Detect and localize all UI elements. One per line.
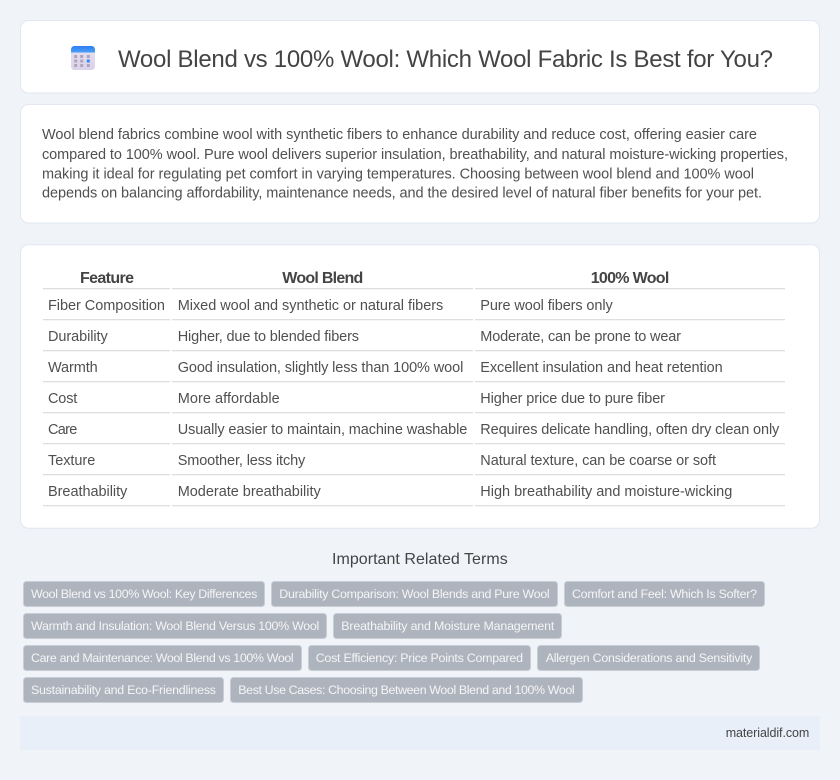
title: Wool Blend vs 100% Wool: Which Wool Fabric Is Best for You?	[118, 46, 773, 73]
icon: calendar	[71, 46, 95, 70]
table row: care: Care	[48, 422, 77, 438]
table row: breathability: Moderate breathability	[178, 484, 321, 500]
table row: warmth: Good insulation, slightly less than 100% wool	[178, 360, 463, 376]
table header row: Wool Blend	[282, 270, 363, 287]
panel: comparison table	[20, 245, 820, 528]
table row: warmth: Excellent insulation and heat retention	[480, 360, 723, 376]
text block: introduction paragraph	[42, 127, 788, 202]
table row: cost: More affordable	[178, 391, 280, 407]
heading: important related terms: Important Related Terms	[332, 551, 508, 568]
table row: care: Usually easier to maintain, machine washable	[178, 422, 467, 438]
tag: durability comparison	[272, 582, 558, 606]
tag: sustainability: Sustainability and Eco-Friendliness	[31, 683, 216, 697]
table row: durability: Moderate, can be prone to wear	[480, 329, 681, 345]
table row: fiber composition: Pure wool fibers only	[480, 298, 613, 314]
table header row	[43, 270, 785, 289]
table header row: 100% Wool	[591, 270, 669, 287]
table row: warmth: Warmth	[48, 360, 98, 376]
table row: breathability	[43, 484, 785, 506]
tag: durability comparison: Durability Comparison: Wool Blends and Pure Wool	[279, 587, 550, 601]
table row: care: Requires delicate handling, often dry clean only	[480, 422, 780, 438]
tag: cost efficiency	[308, 646, 530, 670]
text block: introduction paragraph: Wool blend fabrics combine wool with synthetic fibers to enhance durability and reduce cost, offering easier care	[42, 127, 757, 143]
table row: fiber composition: Fiber Composition	[48, 298, 165, 314]
tag: best use cases: Best Use Cases: Choosing Between Wool Blend and 100% Wool	[238, 683, 575, 697]
panel: introduction	[20, 104, 820, 223]
text block: introduction paragraph: making it ideal for regulating pet comfort in varying temperatures. Choosing between wool blend and 100% wool	[42, 166, 754, 182]
tag: sustainability	[24, 678, 224, 702]
table row: breathability: High breathability and moisture-wicking	[480, 484, 732, 500]
tag: key differences: Wool Blend vs 100% Wool: Key Differences	[31, 587, 257, 601]
table row: cost	[43, 391, 785, 413]
table row: breathability: Breathability	[48, 484, 128, 500]
table row: fiber composition: Mixed wool and synthetic or natural fibers	[178, 298, 443, 314]
text block: introduction paragraph: depends on balancing affordability, maintenance needs, and the desired level of natural fiber benefits for your pet.	[42, 186, 762, 202]
tag: breathability and moisture: Breathability and Moisture Management	[341, 619, 555, 633]
text block: introduction paragraph: compared to 100% wool. Pure wool delivers superior insulation, breathability, and natural moisture-wicking properties,	[42, 147, 788, 163]
table row: cost: Higher price due to pure fiber	[480, 391, 665, 407]
tag: warmth and insulation	[24, 614, 326, 638]
tag: comfort and feel: Comfort and Feel: Which Is Softer?	[572, 587, 757, 601]
table row: texture	[43, 453, 785, 475]
tag: best use cases	[230, 678, 582, 702]
footer source text: materialdif.com	[726, 726, 809, 740]
tag: comfort and feel	[564, 582, 764, 606]
table row: texture: Natural texture, can be coarse or soft	[480, 453, 716, 469]
table row: fiber composition	[43, 298, 785, 320]
tag: cost efficiency: Cost Efficiency: Price Points Compared	[316, 651, 523, 665]
table row: texture: Smoother, less itchy	[178, 453, 306, 469]
footer	[20, 716, 820, 750]
table header row: Feature	[80, 270, 134, 287]
tag: care and maintenance: Care and Maintenance: Wool Blend vs 100% Wool	[31, 651, 294, 665]
table row: cost: Cost	[48, 391, 77, 407]
tag: allergen considerations: Allergen Considerations and Sensitivity	[546, 651, 753, 665]
tag: care and maintenance	[24, 646, 302, 670]
panel: title header	[20, 20, 820, 93]
tag: breathability and moisture	[334, 614, 562, 638]
table row: care	[43, 422, 785, 444]
table row: texture: Texture	[48, 453, 95, 469]
tag: warmth and insulation: Warmth and Insulation: Wool Blend Versus 100% Wool	[31, 619, 319, 633]
tag: key differences	[24, 582, 264, 606]
table row: durability	[43, 329, 785, 351]
tag: allergen considerations	[538, 646, 760, 670]
table row: durability: Higher, due to blended fibers	[178, 329, 359, 345]
table row: warmth	[43, 360, 785, 382]
table row: durability: Durability	[48, 329, 108, 345]
panel: related term tags	[24, 582, 764, 702]
